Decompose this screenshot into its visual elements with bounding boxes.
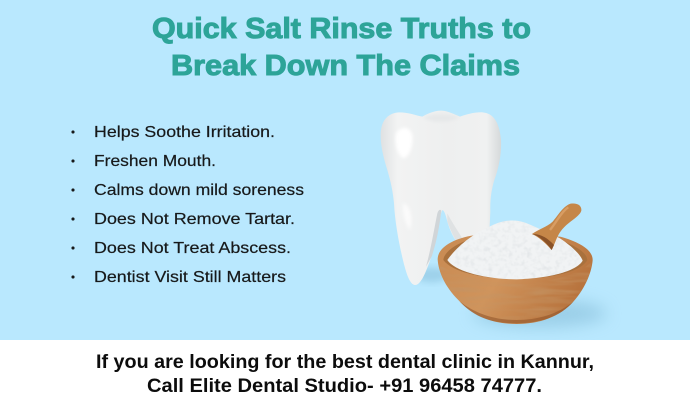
title: Break Down The Claims <box>171 50 520 82</box>
bullet: tartar: Does Not Remove Tartar. <box>94 211 295 228</box>
illustration: tooth and salt bowl <box>381 111 607 327</box>
bullet: abscess: Does Not Treat Abscess. <box>94 240 291 257</box>
title <box>152 13 531 82</box>
icon: wooden scoop <box>532 203 581 250</box>
bullet: calms soreness: Calms down mild soreness <box>94 182 304 199</box>
salt pile <box>447 220 583 279</box>
shadows <box>415 268 607 327</box>
title: Quick Salt Rinse Truths to <box>152 13 531 45</box>
bullet: dentist visit: Dentist Visit Still Matters <box>94 269 286 286</box>
bullet: freshen mouth: Freshen Mouth. <box>94 153 216 170</box>
footer band <box>0 340 690 407</box>
call to action text: If you are looking for the best dental clinic in Kannur, <box>96 352 594 373</box>
call to action text: Call Elite Dental Studio- +91 96458 74777. <box>147 376 542 397</box>
bullet: helps soothe irritation: Helps Soothe Irritation. <box>94 124 275 141</box>
icon: wooden bowl <box>438 235 593 324</box>
icon: tooth <box>381 111 501 285</box>
bullet list <box>72 124 304 286</box>
call to action text <box>96 352 594 397</box>
